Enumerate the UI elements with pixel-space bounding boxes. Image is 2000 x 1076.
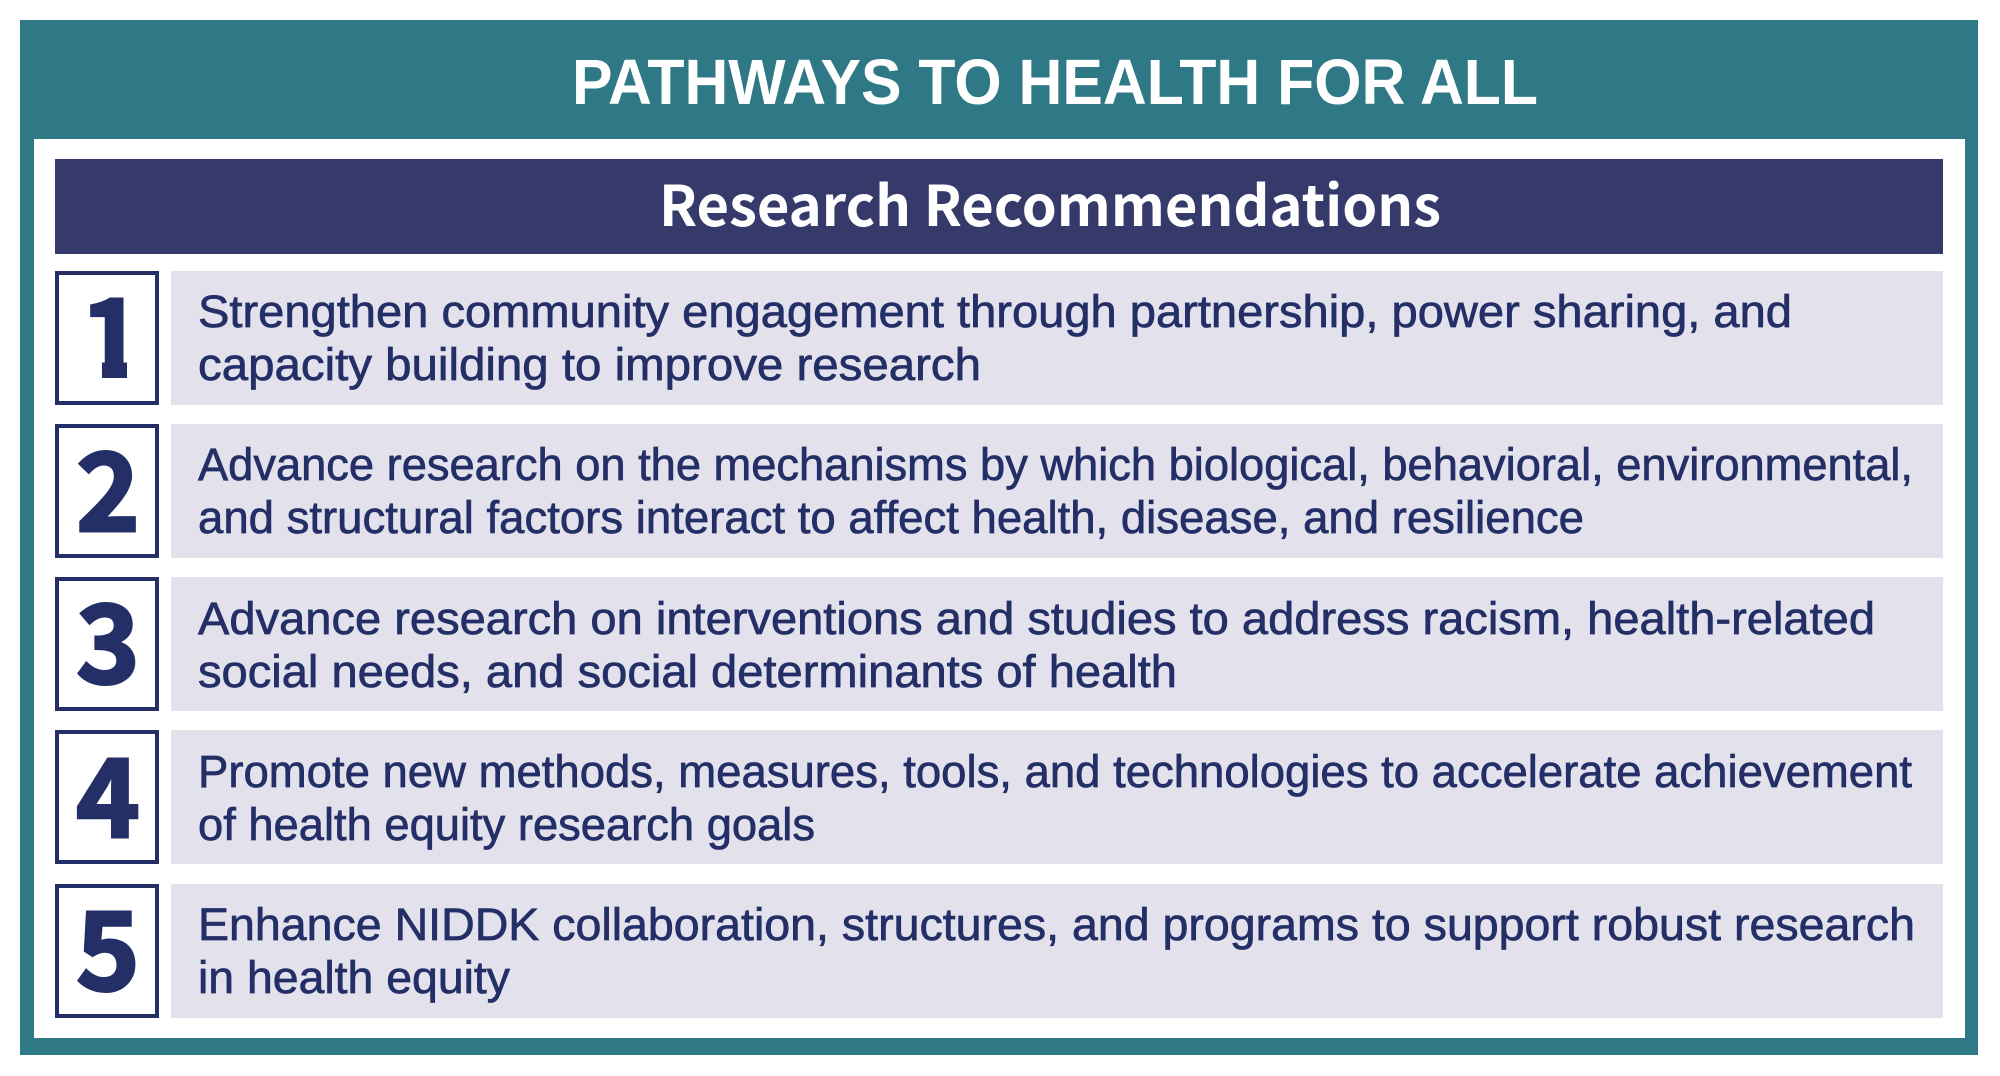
text 1: capacity building to improve research bbox=[198, 339, 981, 390]
text 4 bbox=[198, 746, 1913, 850]
title: PATHWAYS TO HEALTH FOR ALL bbox=[572, 46, 1538, 118]
recommendation 3 bbox=[57, 559, 1943, 715]
recommendation 1 bbox=[55, 271, 1943, 405]
text 2 bbox=[198, 439, 1913, 543]
number 4: 4 bbox=[76, 713, 140, 869]
text 4: of health equity research goals bbox=[198, 799, 815, 850]
text 1 bbox=[198, 286, 1792, 390]
text 5: in health equity bbox=[198, 952, 511, 1003]
number 2: 2 bbox=[76, 407, 140, 563]
text 5: Enhance NIDDK collaboration, structures, and programs to support robust research bbox=[198, 899, 1915, 950]
recommendation 2 bbox=[57, 407, 1943, 563]
text 2: Advance research on the mechanisms by which biological, behavioral, environmental, bbox=[198, 439, 1913, 490]
text 3 bbox=[198, 593, 1875, 697]
text 1: Strengthen community engagement through partnership, power sharing, and bbox=[198, 286, 1792, 337]
panel: subheading bar bbox=[55, 159, 1943, 254]
text 4: Promote new methods, measures, tools, and technologies to accelerate achievement bbox=[198, 746, 1913, 797]
text 2: and structural factors interact to affect health, disease, and resilience bbox=[198, 492, 1584, 543]
text 5 bbox=[198, 899, 1915, 1003]
recommendation 4 bbox=[57, 713, 1943, 869]
subheading: Research Recommendations bbox=[659, 162, 1441, 243]
text 3: social needs, and social determinants of health bbox=[198, 646, 1177, 697]
recommendation 5 bbox=[57, 866, 1943, 1022]
number 1: 1 bbox=[80, 253, 144, 409]
number 5: 5 bbox=[76, 866, 140, 1022]
text 3: Advance research on interventions and studies to address racism, health-related bbox=[198, 593, 1875, 644]
number 3: 3 bbox=[76, 559, 140, 715]
